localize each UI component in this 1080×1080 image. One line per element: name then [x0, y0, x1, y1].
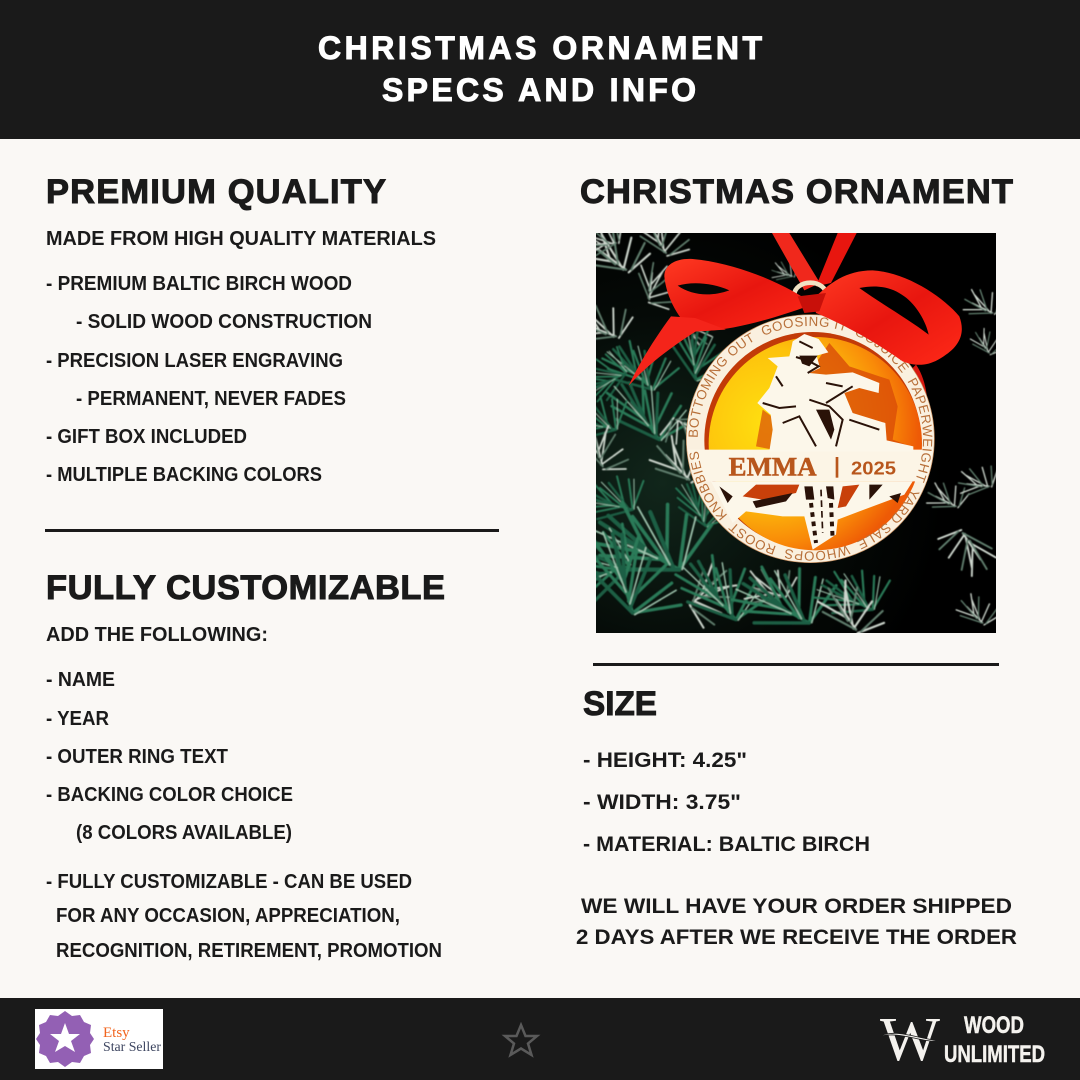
- list: quality features: - MULTIPLE BACKING COLORS: [46, 464, 322, 486]
- outer ring text: BOTTOMING OUT GOOSING IT GOJUICE PAPERWEIGHT YARD SALE WHOOPS ROOST KNOBBIES: [688, 316, 932, 561]
- list: dimensions: [583, 748, 870, 856]
- title: [318, 30, 762, 108]
- name and year: [729, 452, 896, 482]
- list: custom options: - NAME: [46, 669, 115, 691]
- list: quality features: [46, 273, 372, 486]
- text block: occasions: [46, 871, 442, 962]
- panel: size: [583, 685, 870, 856]
- rider silhouette: [756, 334, 913, 451]
- list: quality features: - SOLID WOOD CONSTRUCTION: [76, 311, 372, 333]
- icon: star outline: [505, 1025, 537, 1055]
- title: CHRISTMAS ORNAMENT: [318, 30, 762, 66]
- header banner: [0, 0, 1080, 139]
- title: SPECS AND INFO: [382, 72, 696, 108]
- heading: christmas ornament: CHRISTMAS ORNAMENT: [580, 173, 1013, 211]
- logo: wood unlimited: WOOD: [964, 1012, 1024, 1039]
- intro: materials: MADE FROM HIGH QUALITY MATERIALS: [46, 228, 436, 250]
- text block: occasions: - FULLY CUSTOMIZABLE - CAN BE USED: [46, 871, 412, 893]
- hanging loop: [794, 283, 826, 307]
- footer bar: [0, 998, 1080, 1080]
- list: quality features: - GIFT BOX INCLUDED: [46, 426, 247, 448]
- ornament: [686, 280, 935, 563]
- badge: etsy star seller: Etsy: [103, 1025, 130, 1041]
- list: quality features: - PREMIUM BALTIC BIRCH WOOD: [46, 273, 352, 295]
- list: custom options: (8 COLORS AVAILABLE): [76, 822, 292, 844]
- wood ring: [686, 315, 934, 563]
- name and year: 2025: [851, 458, 896, 478]
- panel: premium quality: [46, 173, 436, 486]
- badge: etsy star seller: [35, 1009, 163, 1069]
- callout: shipping: [576, 894, 1017, 949]
- heading: size: SIZE: [583, 685, 657, 723]
- list: quality features: - PERMANENT, NEVER FADES: [76, 388, 346, 410]
- badge: etsy star seller: Star Seller: [103, 1040, 161, 1055]
- logo: wood unlimited: UNLIMITED: [944, 1041, 1045, 1068]
- name and year: EMMA: [729, 452, 817, 482]
- callout: shipping: WE WILL HAVE YOUR ORDER SHIPPED: [581, 894, 1012, 918]
- tire and branches: [711, 481, 913, 550]
- pine needles: [541, 206, 1008, 640]
- ribbon: bow: [629, 259, 962, 386]
- list: custom options: - BACKING COLOR CHOICE: [46, 784, 293, 806]
- intro: add the following: ADD THE FOLLOWING:: [46, 624, 268, 646]
- text block: occasions: FOR ANY OCCASION, APPRECIATION,: [56, 905, 400, 927]
- list: custom options: - OUTER RING TEXT: [46, 746, 228, 768]
- heading: premium quality: PREMIUM QUALITY: [46, 173, 386, 211]
- list: dimensions: - MATERIAL: BALTIC BIRCH: [583, 832, 870, 856]
- ribbon: back tails: [772, 233, 928, 441]
- text block: occasions: RECOGNITION, RETIREMENT, PROMOTION: [56, 940, 442, 962]
- list: quality features: - PRECISION LASER ENGRAVING: [46, 350, 343, 372]
- logo: wood unlimited: [878, 1006, 1045, 1074]
- name band: [688, 450, 933, 481]
- colored backing: [704, 332, 921, 549]
- heading: fully customizable: FULLY CUSTOMIZABLE: [46, 569, 445, 607]
- list: dimensions: - HEIGHT: 4.25": [583, 748, 747, 772]
- logo: wood unlimited: W: [880, 1006, 940, 1074]
- list: custom options: [46, 669, 293, 844]
- panel: fully customizable: [46, 569, 445, 962]
- photo: ornament on pine tree: [596, 233, 996, 633]
- icon: purple seal: [36, 1011, 94, 1067]
- list: custom options: - YEAR: [46, 708, 110, 730]
- list: dimensions: - WIDTH: 3.75": [583, 790, 741, 814]
- callout: shipping: 2 DAYS AFTER WE RECEIVE THE ORDER: [576, 925, 1017, 949]
